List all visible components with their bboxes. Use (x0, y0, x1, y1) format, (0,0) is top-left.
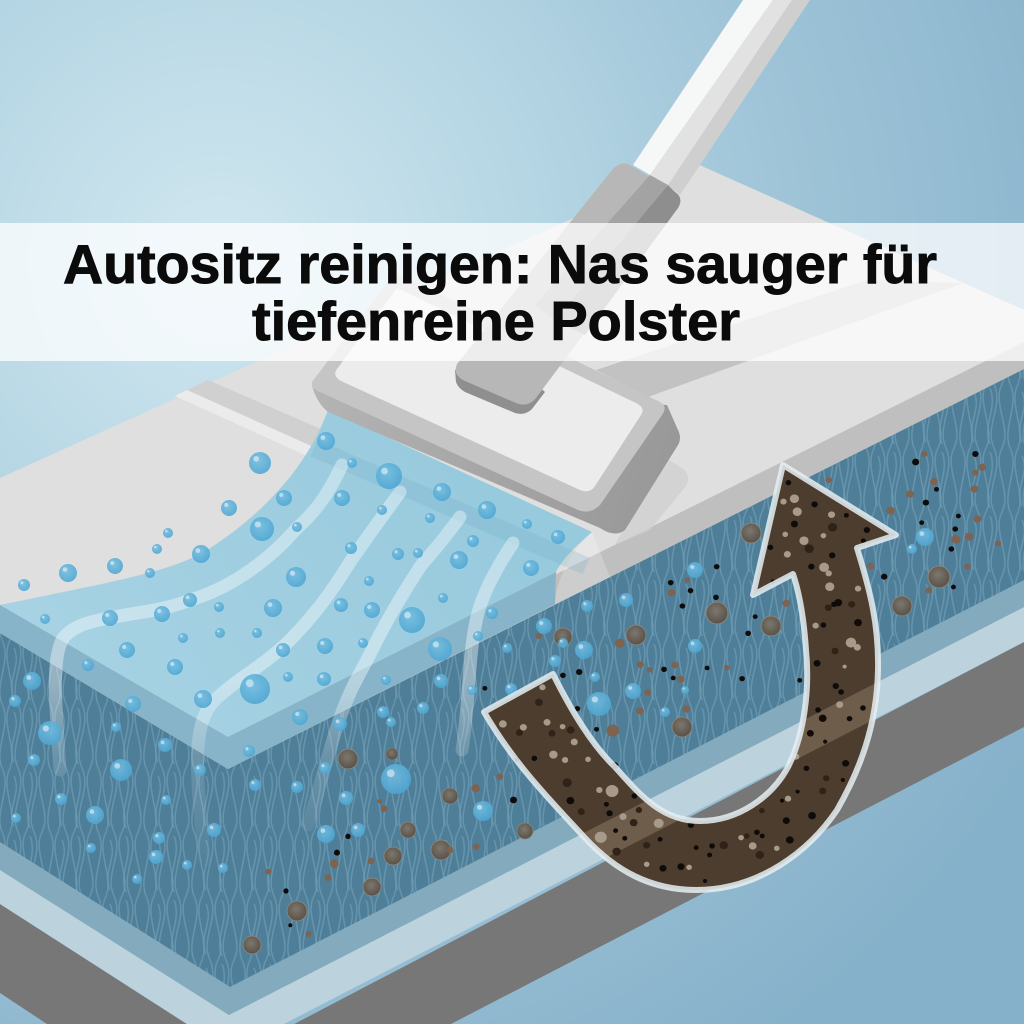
upward dirt arrow (481, 462, 899, 893)
collar shade (555, 185, 680, 335)
title banner (0, 223, 1024, 361)
water on top surface (0, 410, 610, 769)
water streams (55, 465, 513, 860)
stream C (308, 517, 460, 825)
vacuum cleaner (312, 0, 810, 545)
handle white stripe (633, 0, 773, 175)
lighter band through arrow (584, 684, 874, 856)
neck side (455, 370, 545, 414)
stream B (197, 492, 400, 860)
water bubbles (9, 432, 934, 884)
neck body (456, 163, 680, 405)
seam grey band left (187, 380, 330, 450)
stream D (462, 543, 513, 750)
nozzle top plate (335, 288, 643, 491)
handle shaded stripe (668, 0, 810, 195)
arrow outline (484, 465, 896, 890)
lower dark layer (0, 642, 1024, 1024)
top face of seat (0, 163, 1024, 737)
water over edge strip (0, 572, 556, 769)
front edge strip (0, 342, 1024, 769)
arrow grit (499, 480, 870, 883)
nozzle side face (312, 385, 680, 534)
small specks left (265, 773, 503, 937)
title (63, 233, 937, 352)
fibre layer (0, 369, 1024, 987)
lower light layer (0, 607, 1024, 1024)
collar mid shade (535, 175, 668, 320)
arrow body (484, 465, 896, 890)
nozzle shadow (615, 455, 688, 545)
title line 1: Autositz reinigen: Nas sauger für (63, 233, 937, 295)
pale patch beside water (555, 532, 610, 604)
handle mid stripe (650, 0, 792, 185)
seam grey band right (596, 280, 963, 397)
dust particles in fibre (243, 451, 1001, 954)
large dirt grains (243, 523, 950, 954)
nozzle frame (312, 272, 665, 512)
seam pale band left (175, 390, 320, 456)
backing layer (0, 580, 1024, 1015)
water sheet (0, 410, 592, 737)
title line 2: tiefenreine Polster (252, 290, 740, 352)
small specks right (471, 451, 1001, 850)
flow band (314, 448, 586, 566)
stream A (55, 465, 342, 770)
